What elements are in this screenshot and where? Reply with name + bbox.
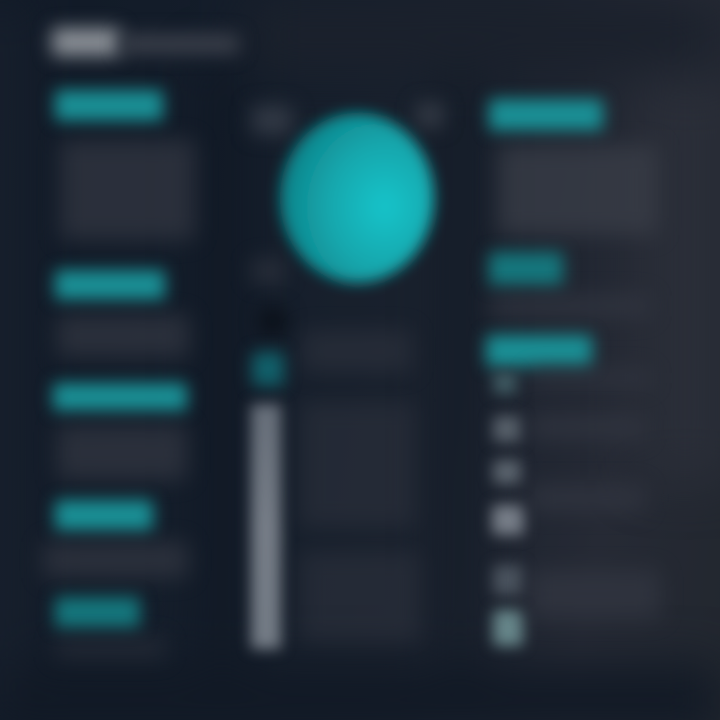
right text 2 bbox=[490, 295, 650, 317]
section 3 heading bbox=[53, 383, 187, 411]
section 4 heading bbox=[55, 500, 153, 531]
vertical light bar bbox=[251, 404, 281, 649]
list icons bbox=[483, 368, 532, 655]
title bbox=[40, 16, 244, 68]
chart: teal circle bbox=[270, 104, 444, 292]
section 1 heading bbox=[55, 90, 163, 121]
icon 6 bbox=[493, 610, 523, 646]
section 3 text bbox=[57, 425, 187, 480]
small mark right bbox=[416, 102, 444, 128]
caption below circle bbox=[252, 260, 284, 282]
list text 2 bbox=[530, 415, 645, 439]
center text block top bbox=[302, 330, 412, 372]
center text block middle bbox=[300, 402, 415, 527]
list text 1 bbox=[530, 370, 650, 386]
panel: right column bbox=[475, 88, 654, 655]
section 2 text bbox=[57, 315, 189, 357]
icon 1 bbox=[493, 372, 517, 394]
icon 4 bbox=[492, 505, 524, 535]
icon 2 bbox=[493, 416, 521, 442]
center text block bottom bbox=[300, 552, 420, 642]
small marks above circle bbox=[252, 106, 292, 134]
section 5 text bbox=[55, 638, 165, 658]
right heading 2 bbox=[489, 252, 563, 286]
section 5 heading bbox=[55, 597, 140, 628]
panel: left column bbox=[41, 79, 198, 656]
icon 3 bbox=[493, 460, 521, 484]
panel: center column bbox=[242, 100, 447, 658]
section 4 text bbox=[43, 542, 188, 578]
section 1 text bbox=[60, 140, 195, 240]
right text 1 bbox=[498, 145, 658, 235]
dark marker bbox=[258, 306, 288, 336]
list text 4 bbox=[530, 570, 660, 618]
teal marker bbox=[252, 352, 284, 386]
right heading 1 bbox=[489, 99, 603, 131]
icon 5 bbox=[493, 565, 523, 595]
section 2 heading bbox=[55, 270, 165, 300]
list text 3 bbox=[530, 485, 645, 511]
right heading 3 bbox=[486, 335, 592, 367]
